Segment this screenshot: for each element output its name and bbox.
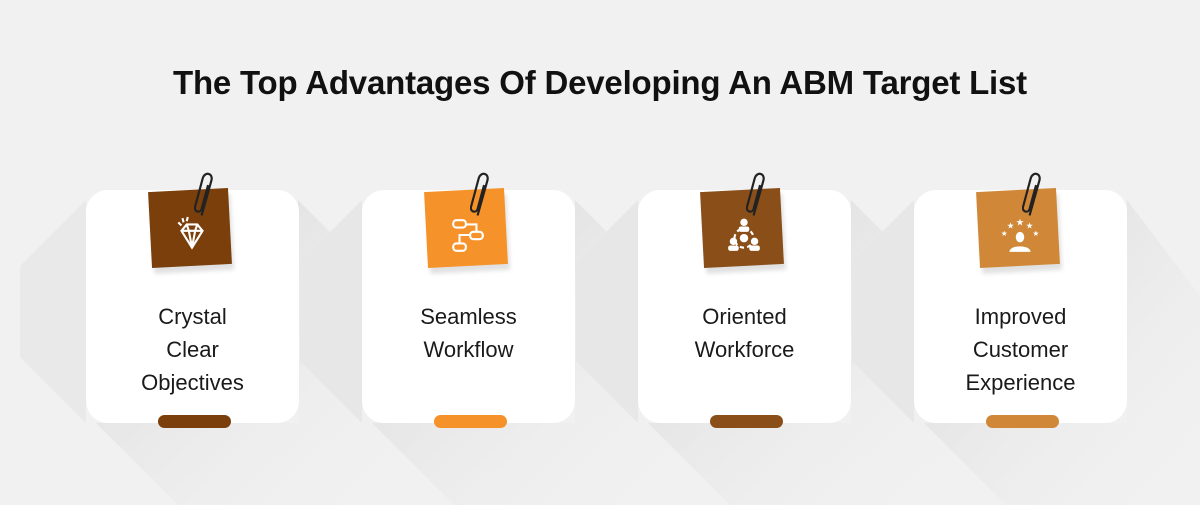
text: Improved — [975, 304, 1066, 329]
title: The Top Advantages Of Developing An ABM Target List — [173, 64, 1027, 101]
icon: diamond — [178, 216, 204, 250]
text: Seamless — [420, 304, 517, 329]
text: Clear — [166, 337, 219, 362]
text — [420, 304, 517, 362]
icon: paperclip — [194, 172, 213, 216]
text — [141, 304, 244, 395]
note: light brown — [976, 188, 1060, 268]
text: Workforce — [695, 337, 794, 362]
bar — [434, 415, 507, 428]
text: Experience — [965, 370, 1076, 395]
panel: seamless workflow — [362, 190, 575, 423]
panel: improved customer experience — [914, 190, 1127, 423]
text: Customer — [973, 337, 1068, 362]
text: Workflow — [423, 337, 514, 362]
icon: paperclip — [746, 172, 765, 216]
icon: paperclip — [1022, 172, 1041, 216]
note: brown — [700, 188, 784, 268]
text — [965, 304, 1076, 395]
bar — [710, 415, 783, 428]
icon: team — [728, 218, 760, 251]
text — [694, 304, 794, 362]
icon: workflow — [452, 219, 484, 252]
panel: crystal clear objectives — [86, 190, 299, 423]
bar — [986, 415, 1059, 428]
note: orange — [424, 188, 508, 268]
panel: oriented workforce — [638, 190, 851, 423]
text: Crystal — [158, 304, 227, 329]
note: brown — [148, 188, 232, 268]
icon: customer stars: ★ — [1007, 221, 1014, 231]
icon: customer stars — [1001, 217, 1039, 252]
bar — [158, 415, 231, 428]
icon: customer stars: ★ — [1001, 229, 1007, 238]
icon: customer stars: ★ — [1016, 217, 1025, 228]
icon: paperclip — [470, 172, 489, 216]
icon: customer stars: ★ — [1026, 221, 1033, 231]
icon: customer stars: ★ — [1033, 229, 1039, 238]
text: Objectives — [141, 370, 244, 395]
text: Oriented — [702, 304, 787, 329]
